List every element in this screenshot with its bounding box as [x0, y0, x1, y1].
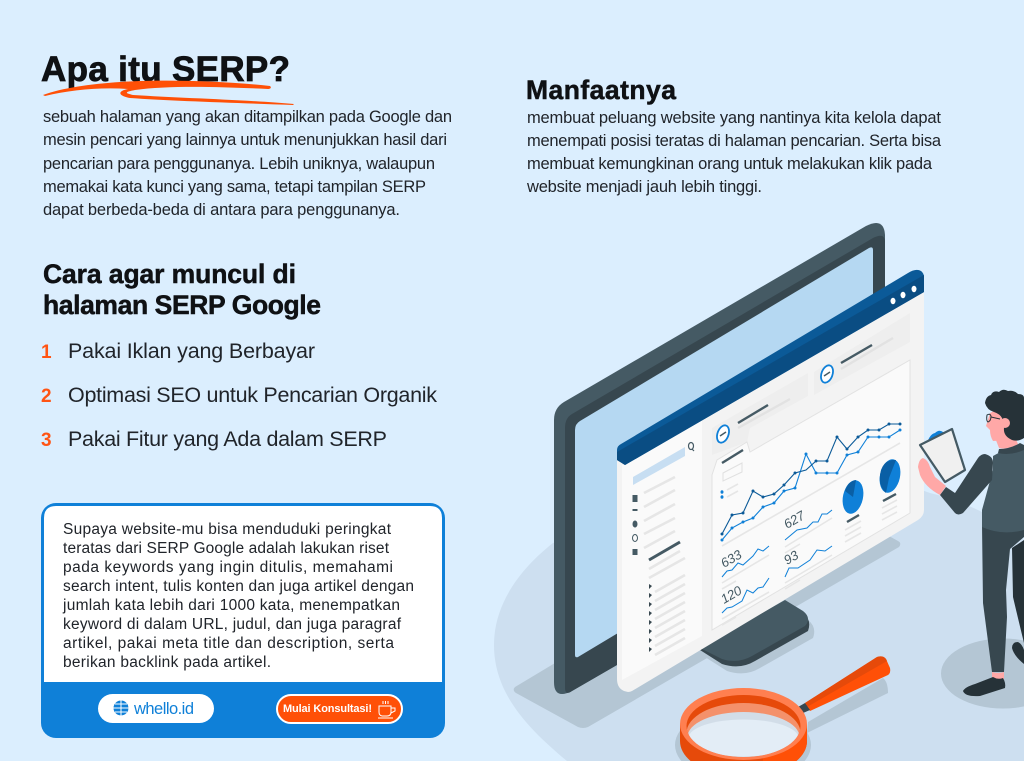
text block: benefits: website menjadi jauh lebih tinggi. [526, 178, 762, 196]
trousers [982, 525, 1024, 672]
text block: benefits [526, 109, 942, 196]
sparkline: 93 [781, 546, 832, 589]
title: Apa itu SERP? [41, 50, 294, 105]
sidebar [632, 442, 694, 655]
numbered list: 3 [41, 430, 52, 451]
lens [686, 695, 800, 757]
numbered list: 2 [41, 386, 52, 407]
callout text [62, 521, 414, 671]
stat card 2 [814, 313, 910, 395]
monitor stand [700, 600, 814, 673]
numbered list: Pakai Fitur yang Ada dalam SERP [68, 427, 387, 451]
numbered list: Pakai Iklan yang Berbayar [68, 339, 315, 363]
lens shadow [675, 707, 811, 761]
person [918, 390, 1024, 696]
monitor shadow [514, 520, 900, 728]
sparkline: 120: 120 [718, 582, 745, 607]
sparkline: 633: 633 [718, 546, 745, 571]
neck [992, 430, 1018, 448]
search icon [688, 442, 694, 451]
heading: how to appear on SERP: Cara agar muncul di [43, 259, 296, 289]
sparkline: 627: 627 [781, 507, 808, 532]
text block: SERP definition [43, 108, 452, 219]
browser window [617, 270, 924, 692]
chart panel [712, 360, 910, 630]
title: Apa itu SERP?: Apa itu SERP? [41, 50, 290, 89]
sparkline: 633 [718, 546, 769, 589]
callout text: keyword di dalam URL, judul, dan juga paragraf [63, 616, 402, 633]
head [986, 405, 1012, 441]
callout text: berikan backlink pada artikel. [63, 654, 271, 671]
back leg and foot [1012, 540, 1024, 664]
magnifier handle shadow [807, 678, 888, 733]
callout text: artikel, pakai meta title dan description, serta [63, 635, 394, 652]
button: whello.id [98, 694, 214, 723]
illustration: monitor, person and magnifier [494, 223, 1024, 761]
search field [633, 447, 685, 485]
person shadow [941, 638, 1024, 708]
pie chart 1 [840, 478, 866, 542]
heading: how to appear on SERP: halaman SERP Google [43, 290, 321, 320]
heading: Manfaatnya: Manfaatnya [526, 75, 676, 105]
magnifier ring [680, 688, 807, 760]
magnifier body [680, 724, 807, 761]
callout text: Supaya website-mu bisa menduduki peringkat [63, 521, 392, 538]
magnifier [675, 656, 890, 761]
glasses [987, 414, 1000, 422]
monitor screen [575, 247, 873, 657]
title bar [617, 270, 924, 465]
numbered list [41, 339, 437, 451]
text block: benefits: menempati posisi teratas di halaman pencarian. Serta bisa [527, 132, 942, 150]
callout text: pada keywords yang ingin ditulis, memahami [63, 559, 393, 576]
numbered list: 1 [41, 342, 52, 363]
collar [998, 443, 1024, 454]
text block: SERP definition: mesin pencari yang lainnya untuk menunjukkan hasil dari [43, 131, 447, 149]
pie chart 2 [877, 457, 903, 520]
heading: how to appear on SERP [43, 259, 321, 320]
stat card 1 [712, 373, 808, 455]
text block: SERP definition: dapat berbeda-beda di antara para penggunanya. [43, 201, 400, 219]
icon: coffee cup [378, 701, 395, 718]
callout text: search intent, tulis konten dan juga artikel dengan [63, 578, 414, 595]
monitor [554, 223, 885, 694]
text block: SERP definition: pencarian para penggunanya. Lebih uniknya, walaupun [43, 155, 435, 173]
text block: SERP definition: memakai kata kunci yang sama, tetapi tampilan SERP [43, 178, 426, 196]
clipboard [920, 429, 965, 482]
text block: SERP definition: sebuah halaman yang akan ditampilkan pada Google dan [43, 108, 452, 126]
ear [1000, 418, 1010, 428]
list markers [649, 584, 652, 652]
sidebar icons [632, 495, 638, 555]
callout text: teratas dari SERP Google adalah lakukan riset [63, 540, 390, 557]
sock [992, 672, 1004, 679]
magnifier handle [798, 656, 890, 713]
hair [985, 390, 1024, 441]
numbered list: Optimasi SEO untuk Pencarian Organik [68, 383, 437, 407]
arm [940, 454, 993, 514]
panel: callout [41, 503, 445, 738]
text block: benefits: membuat kemungkinan orang untuk melakukan klik pada [527, 155, 933, 173]
line chart [720, 422, 902, 542]
button: Mulai Konsultasi [277, 695, 402, 723]
window dots [890, 286, 916, 304]
callout text: jumlah kata lebih dari 1000 kata, menempatkan [62, 597, 400, 614]
sparkline: 93: 93 [781, 547, 802, 568]
shoe [963, 677, 1005, 696]
button: whello.id: whello.id [133, 700, 194, 718]
sparkline: 120 [718, 578, 769, 625]
hand [918, 458, 946, 495]
text block: benefits: membuat peluang website yang nantinya kita kelola dapat [527, 109, 941, 127]
floor shape [494, 470, 1024, 761]
button: Mulai Konsultasi: Mulai Konsultasi! [283, 703, 372, 715]
sparkline: 627 [781, 507, 832, 553]
torso [982, 450, 1024, 532]
clipboard clip [927, 431, 947, 444]
